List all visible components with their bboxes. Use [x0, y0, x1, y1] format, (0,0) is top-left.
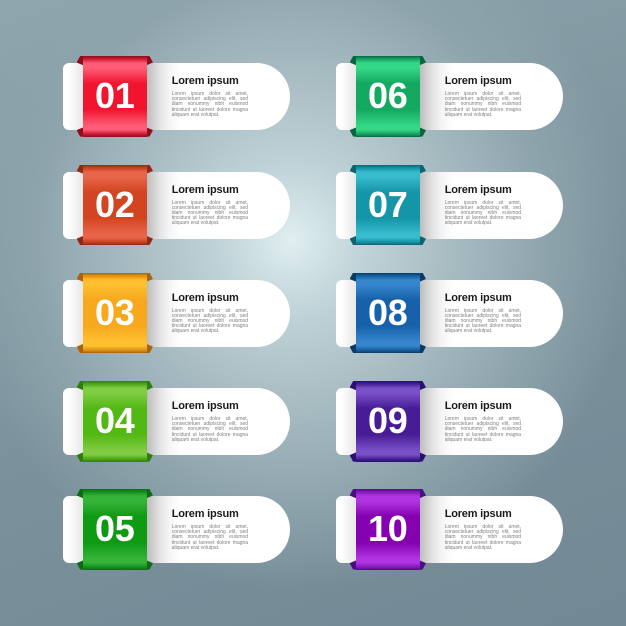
text block: item 04: Lorem ipsum dolor sit amet,: [172, 416, 248, 422]
ribbon: 09: [350, 381, 426, 462]
panel: item 10: [336, 489, 563, 570]
text block: item 05: tincidunt ut laoreet dolore magna: [172, 540, 248, 546]
text block: item 09: aliquam erat volutpat.: [445, 437, 492, 443]
text block: item 01: consectetuer adipiscing elit, sed: [172, 96, 248, 102]
text block: item 10: aliquam erat volutpat.: [445, 545, 492, 551]
text block: item 10: tincidunt ut laoreet dolore magna: [445, 540, 521, 546]
ribbon: 01: 01: [95, 75, 135, 116]
text block: item 03: consectetuer adipiscing elit, sed: [172, 313, 248, 319]
heading: item 05: Lorem ipsum: [172, 508, 239, 520]
ribbon: 04: [77, 381, 153, 462]
text block: item 10: consectetuer adipiscing elit, sed: [445, 529, 521, 535]
text block: item 08: [444, 308, 521, 334]
text block: item 06: diam nonummy nibh euismod: [445, 101, 521, 107]
ribbon: 05: 05: [95, 508, 135, 549]
ribbon: 04: 04: [95, 400, 135, 441]
text block: item 02: [172, 200, 248, 226]
ribbon: 10: 10: [368, 508, 408, 549]
heading: item 04: Lorem ipsum: [172, 400, 239, 412]
ribbon: 10: [350, 489, 426, 570]
text block: item 08: Lorem ipsum dolor sit amet,: [445, 308, 521, 314]
panel: item 09: [336, 381, 563, 462]
text block: item 10: [444, 524, 521, 551]
text block: item 07: [444, 200, 521, 226]
text block: item 07: diam nonummy nibh euismod: [445, 210, 521, 216]
ribbon: 02: [77, 165, 153, 245]
ribbon: 02: 02: [95, 184, 135, 224]
text block: item 09: [444, 416, 521, 443]
text block: item 06: aliquam erat volutpat.: [445, 112, 492, 118]
heading: item 02: Lorem ipsum: [172, 184, 239, 196]
text block: item 02: consectetuer adipiscing elit, sed: [172, 205, 248, 211]
text block: item 05: aliquam erat volutpat.: [172, 545, 220, 551]
panel: item 06: [336, 56, 563, 137]
text block: item 02: diam nonummy nibh euismod: [172, 210, 248, 216]
ribbon: 01: [77, 56, 153, 137]
heading: item 01: Lorem ipsum: [172, 75, 239, 87]
heading: item 08: Lorem ipsum: [445, 292, 512, 304]
text block: item 04: aliquam erat volutpat.: [172, 437, 220, 443]
text block: item 06: consectetuer adipiscing elit, sed: [445, 96, 521, 102]
text block: item 06: Lorem ipsum dolor sit amet,: [445, 91, 521, 97]
text block: item 01: [172, 91, 248, 118]
text block: item 09: consectetuer adipiscing elit, sed: [445, 421, 521, 427]
ribbon: 06: [350, 56, 426, 137]
panel: item 01: [63, 56, 290, 137]
ribbon: 03: [77, 273, 153, 353]
text block: item 03: tincidunt ut laoreet dolore magna: [172, 323, 248, 329]
heading: item 07: Lorem ipsum: [445, 184, 512, 196]
panel: item 04: [63, 381, 290, 462]
text block: item 10: Lorem ipsum dolor sit amet,: [445, 524, 521, 530]
text block: item 01: tincidunt ut laoreet dolore magna: [172, 107, 248, 113]
ribbon: 05: [77, 489, 153, 570]
text block: item 01: diam nonummy nibh euismod: [172, 101, 248, 107]
text block: item 07: tincidunt ut laoreet dolore magna: [445, 215, 521, 221]
text block: item 05: consectetuer adipiscing elit, sed: [172, 529, 248, 535]
text block: item 04: consectetuer adipiscing elit, sed: [172, 421, 248, 427]
ribbon: 07: [350, 165, 426, 245]
text block: item 01: aliquam erat volutpat.: [172, 112, 220, 118]
ribbon: 08: [350, 273, 426, 353]
text block: item 08: consectetuer adipiscing elit, sed: [445, 313, 521, 319]
text block: item 02: aliquam erat volutpat.: [172, 220, 220, 226]
heading: item 06: Lorem ipsum: [445, 75, 512, 87]
panel: item 07: [336, 165, 563, 245]
ribbon: 08: 08: [368, 292, 408, 332]
text block: item 05: diam nonummy nibh euismod: [172, 534, 248, 540]
text block: item 10: diam nonummy nibh euismod: [445, 534, 521, 540]
text block: item 03: aliquam erat volutpat.: [172, 328, 220, 334]
text block: item 09: diam nonummy nibh euismod: [445, 426, 521, 432]
text block: item 03: [172, 308, 248, 334]
ribbon: 06: 06: [368, 75, 408, 116]
text block: item 08: diam nonummy nibh euismod: [445, 318, 521, 324]
panel: item 08: [336, 273, 563, 353]
ribbon: 03: 03: [95, 292, 135, 332]
text block: item 01: Lorem ipsum dolor sit amet,: [172, 91, 248, 97]
text block: item 04: diam nonummy nibh euismod: [172, 426, 248, 432]
text block: item 04: tincidunt ut laoreet dolore magna: [172, 432, 248, 438]
heading: item 09: Lorem ipsum: [445, 400, 512, 412]
text block: item 05: Lorem ipsum dolor sit amet,: [172, 524, 248, 530]
heading: item 10: Lorem ipsum: [445, 508, 512, 520]
panel: item 02: [63, 165, 290, 245]
text block: item 08: aliquam erat volutpat.: [445, 328, 492, 334]
ribbon: 07: 07: [368, 184, 408, 224]
text block: item 03: diam nonummy nibh euismod: [172, 318, 248, 324]
text block: item 02: tincidunt ut laoreet dolore magna: [172, 215, 248, 221]
text block: item 07: Lorem ipsum dolor sit amet,: [445, 200, 521, 206]
text block: item 07: aliquam erat volutpat.: [445, 220, 492, 226]
text block: item 04: [172, 416, 248, 443]
panel: item 05: [63, 489, 290, 570]
text block: item 03: Lorem ipsum dolor sit amet,: [172, 308, 248, 314]
text block: item 07: consectetuer adipiscing elit, sed: [445, 205, 521, 211]
text block: item 06: [444, 91, 521, 118]
text block: item 09: tincidunt ut laoreet dolore magna: [445, 432, 521, 438]
panel: item 03: [63, 273, 290, 353]
text block: item 02: Lorem ipsum dolor sit amet,: [172, 200, 248, 206]
text block: item 08: tincidunt ut laoreet dolore magna: [445, 323, 521, 329]
ribbon: 09: 09: [368, 400, 408, 441]
heading: item 03: Lorem ipsum: [172, 292, 239, 304]
text block: item 06: tincidunt ut laoreet dolore magna: [445, 107, 521, 113]
text block: item 09: Lorem ipsum dolor sit amet,: [445, 416, 521, 422]
text block: item 05: [172, 524, 248, 551]
